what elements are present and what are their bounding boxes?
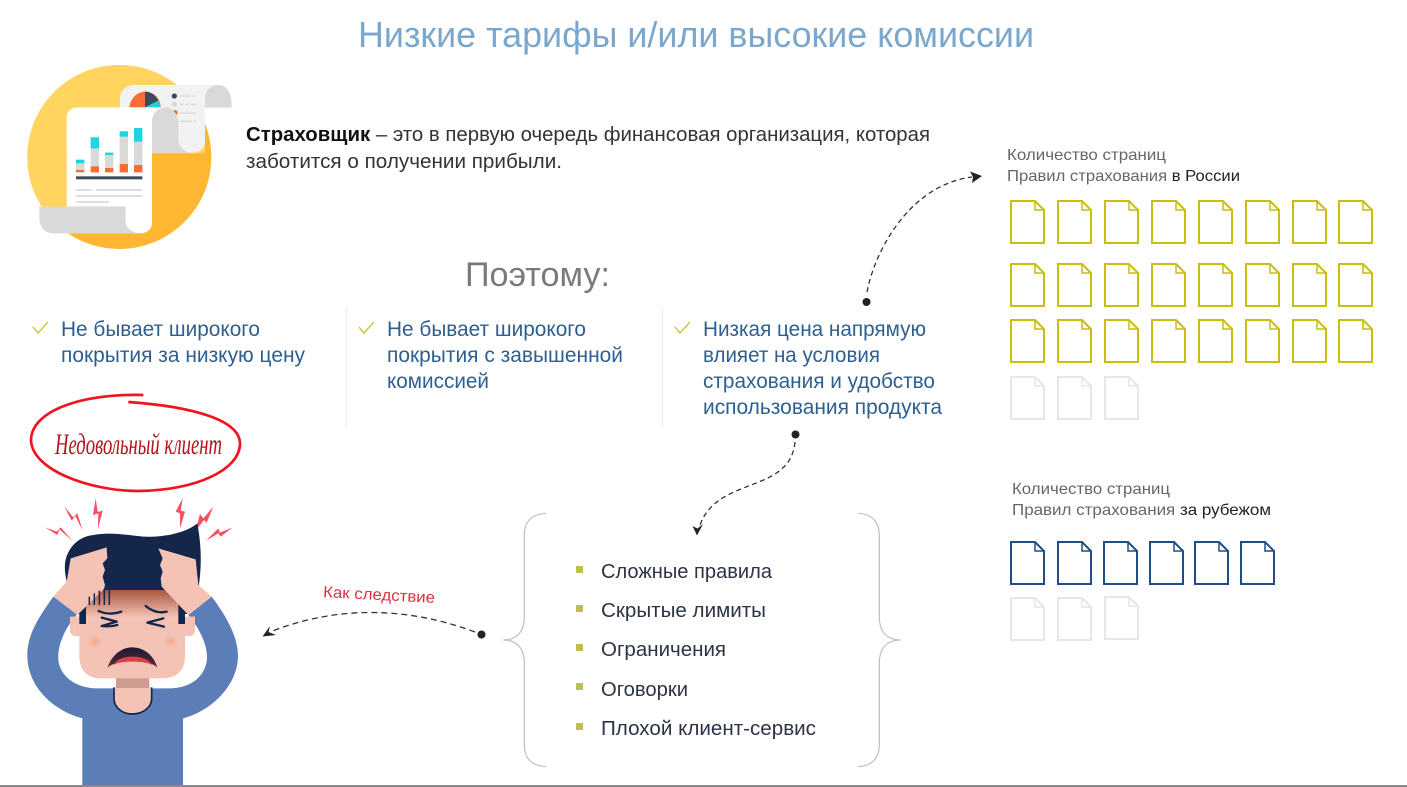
point 2: покрытия с завышенной xyxy=(387,344,623,367)
intro text xyxy=(246,124,930,173)
label: pages in Russia: Количество страниц xyxy=(1007,147,1166,164)
title: Низкие тарифы и/или высокие комиссии xyxy=(358,14,1034,55)
curly braces and list xyxy=(503,513,901,767)
curly braces and list: Сложные правила xyxy=(601,561,773,583)
illustration: stressed man xyxy=(27,498,238,786)
curly braces and list: Плохой клиент-сервис xyxy=(601,718,816,740)
curly braces and list: Скрытые лимиты xyxy=(601,600,766,622)
point 2: Не бывает широкого xyxy=(387,318,586,341)
curly braces and list: Оговорки xyxy=(601,679,688,701)
arrow: to list xyxy=(692,430,800,536)
heading: therefore: Поэтому: xyxy=(465,256,610,294)
label: pages in Russia: Правил страхования в России xyxy=(1007,168,1240,185)
point 3: Низкая цена напрямую xyxy=(703,318,926,341)
point 3: использования продукта xyxy=(703,396,942,419)
point 1 xyxy=(33,318,305,367)
callout: unhappy client: Недовольный клиент xyxy=(54,428,222,461)
label: pages abroad xyxy=(1012,481,1271,519)
intro text: заботится о получении прибыли. xyxy=(246,151,562,173)
arrow: as a consequence xyxy=(262,584,486,638)
point 2 xyxy=(359,318,623,393)
intro text: Страховщик – это в первую очередь финансовая организация, которая xyxy=(246,124,930,146)
label: pages in Russia xyxy=(1007,147,1240,185)
point 3 xyxy=(675,318,942,419)
point 1: покрытия за низкую цену xyxy=(61,344,305,367)
callout: unhappy client xyxy=(31,395,240,491)
arrow: to Russian rules xyxy=(862,172,982,306)
label: pages abroad: Правил страхования за рубежом xyxy=(1012,502,1271,519)
arrow: as a consequence: Как следствие xyxy=(323,584,436,607)
icon: financial documents xyxy=(27,65,232,249)
page grid: abroad xyxy=(1011,542,1274,640)
label: pages abroad: Количество страниц xyxy=(1012,481,1170,498)
point 3: страхования и удобство xyxy=(703,370,935,393)
point 2: комиссией xyxy=(387,370,489,393)
point 1: Не бывает широкого xyxy=(61,318,260,341)
point 3: влияет на условия xyxy=(703,344,880,367)
curly braces and list: Ограничения xyxy=(601,639,726,661)
page grid: Russia xyxy=(1011,201,1372,419)
